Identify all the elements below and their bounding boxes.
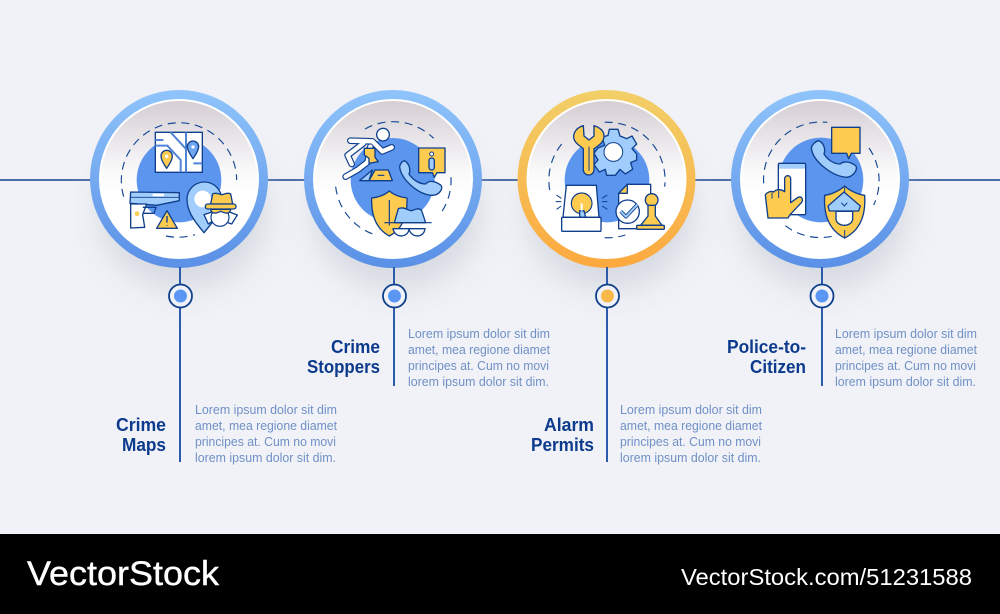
description 4: Lorem ipsum dolor sit dim [835,327,977,341]
connector 3 [606,267,608,462]
step 2: Crime Stoppers [304,90,551,389]
footer logo: VectorStock [27,555,220,593]
node 3 [596,284,619,308]
description 4 [835,327,978,389]
description 2: lorem ipsum dolor sit dim. [408,375,549,389]
footer bar [0,534,1000,614]
description 4: amet, mea regione diamet [835,343,978,357]
description 3: principes at. Cum no movi [620,435,761,449]
timeline axis [0,179,1000,181]
heading: Police-to-Citizen: Citizen [750,357,806,377]
node 4 [810,284,834,308]
heading: Crime Maps [116,415,166,455]
description 3: lorem ipsum dolor sit dim. [620,451,761,465]
step 4: Police-to-Citizen [727,90,978,389]
connector 2 [393,267,395,386]
description 2 [408,327,551,389]
description 3: Lorem ipsum dolor sit dim [620,403,762,417]
heading: Police-to-Citizen: Police-to- [727,337,806,357]
heading: Crime Stoppers: Crime [331,337,380,357]
description 2: amet, mea regione diamet [408,343,551,357]
description 1: amet, mea regione diamet [195,419,338,433]
circle badge 4 [731,90,909,290]
circle badge 2 [304,90,482,290]
heading: Crime Stoppers: Stoppers [307,357,380,377]
footer image id: VectorStock.com/51231588 [681,564,972,590]
heading: Crime Maps: Maps [122,435,166,455]
connector 4 [821,267,823,386]
circle badge 1 [90,90,268,290]
circle badge 3 [518,90,696,290]
heading: Crime Stoppers [307,337,380,377]
icon: wrench, gear, alarm and stamped document [549,122,665,238]
heading: Police-to-Citizen [727,337,806,377]
description 1: Lorem ipsum dolor sit dim [195,403,337,417]
heading: Alarm Permits: Alarm [544,415,594,435]
icon: phone, smartphone touch and police shield [764,122,879,238]
connector 1 [179,267,181,462]
icon: map, gun, pin and suspect [121,123,237,237]
description 4: lorem ipsum dolor sit dim. [835,375,976,389]
node 2 [383,284,406,308]
description 2: principes at. Cum no movi [408,359,549,373]
description 3: amet, mea regione diamet [620,419,763,433]
step 1: Crime Maps [90,90,338,465]
heading: Alarm Permits: Permits [531,435,594,455]
description 1: lorem ipsum dolor sit dim. [195,451,336,465]
step 3: Alarm Permits [518,90,763,465]
node 1 [169,284,192,308]
description 1 [195,403,338,465]
description 3 [620,403,763,465]
heading: Alarm Permits [531,415,594,455]
description 2: Lorem ipsum dolor sit dim [408,327,550,341]
icon: runner, phone, info bubble, shield and hat [336,122,451,236]
description 1: principes at. Cum no movi [195,435,336,449]
description 4: principes at. Cum no movi [835,359,976,373]
heading: Crime Maps: Crime [116,415,166,435]
